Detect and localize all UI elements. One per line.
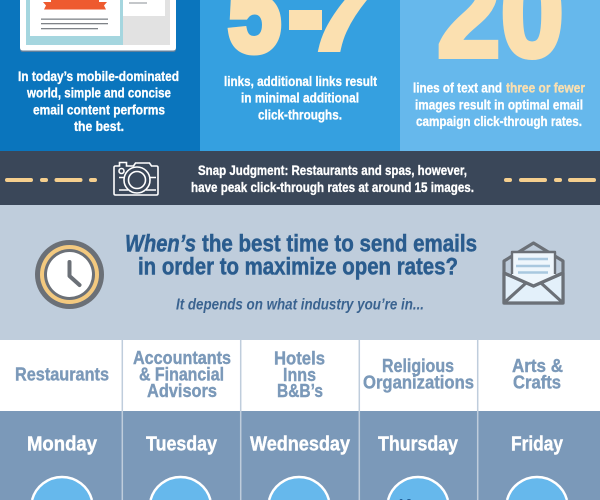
- text: links description: click-throughs.: [258, 106, 342, 122]
- text: lines description: three or fewer: [506, 80, 585, 96]
- panel: 5-7 links: [200, 0, 400, 151]
- label: hotels: Hotels: [274, 348, 325, 368]
- panel: simple and concise content: [0, 0, 200, 151]
- panel: 20 lines of text: [400, 0, 600, 151]
- circle: tuesday: [151, 477, 210, 500]
- text: links description: in minimal additional: [241, 90, 359, 106]
- text: links description: links, additional links result: [224, 73, 377, 89]
- day: tuesday: Tuesday: [146, 434, 218, 456]
- circle: monday: [32, 477, 92, 500]
- text: links description: [224, 73, 377, 122]
- band: snap judgment: [0, 151, 600, 205]
- left dashes: [5, 178, 97, 182]
- label: hotels: [274, 348, 325, 401]
- label: arts: Arts &: [512, 356, 563, 376]
- label: accountants: & Financial: [139, 364, 224, 384]
- label: religious: Religious: [382, 356, 454, 376]
- label: accountants: Accountants: [133, 348, 231, 368]
- text: snap judgment: [191, 162, 474, 195]
- text: mobile-dominated world: world, simple and concise: [26, 84, 171, 100]
- day: thursday: Thursday: [378, 434, 459, 456]
- text: snap judgment: Snap Judgment: Restaurants and spas, however,: [198, 162, 467, 178]
- text: mobile-dominated world: the best.: [74, 118, 124, 134]
- number: 5-7: [228, 0, 391, 76]
- label: hotels: B&B’s: [277, 381, 323, 401]
- circle: wednesday: [269, 477, 329, 500]
- circle: thursday: [388, 477, 448, 500]
- label: restaurants: Restaurants: [15, 364, 109, 384]
- circle: friday: [507, 477, 567, 500]
- text: lines description: [413, 80, 585, 129]
- subheading: It depends on what industry you’re in...: [176, 296, 424, 314]
- label: arts: Crafts: [513, 372, 561, 392]
- panel: when to send: [0, 205, 600, 340]
- day: friday: Friday: [511, 434, 564, 456]
- day: monday: Monday: [27, 434, 98, 456]
- icon: clock: [35, 240, 104, 309]
- label: arts: [512, 356, 563, 392]
- heading: best time: in order to maximize open rates?: [138, 254, 458, 280]
- icon: camera: [114, 162, 158, 195]
- text: lines description: lines of text and: [413, 80, 502, 96]
- label: religious: Organizations: [363, 372, 474, 392]
- icon: open envelope: [504, 243, 563, 303]
- text: mobile-dominated world: email content performs: [33, 102, 165, 118]
- row: days: [0, 411, 600, 500]
- label: accountants: Advisors: [147, 381, 217, 401]
- label: religious: [363, 356, 474, 392]
- text: mobile-dominated world: In today’s mobile-dominated: [18, 68, 179, 84]
- label: accountants: [133, 348, 231, 401]
- text: mobile-dominated world: [18, 68, 179, 134]
- day: wednesday: Wednesday: [250, 434, 351, 456]
- heading: best time: the best time to send emails: [202, 230, 477, 258]
- row: industries: [0, 340, 600, 411]
- label: hotels: Inns: [283, 365, 316, 385]
- heading: best time: When’s: [125, 230, 196, 258]
- heading: best time: [125, 230, 477, 280]
- right dashes: [504, 178, 596, 182]
- text: snap judgment: have peak click-through rates at around 15 images.: [191, 179, 474, 195]
- icon: email on devices: [20, 0, 176, 52]
